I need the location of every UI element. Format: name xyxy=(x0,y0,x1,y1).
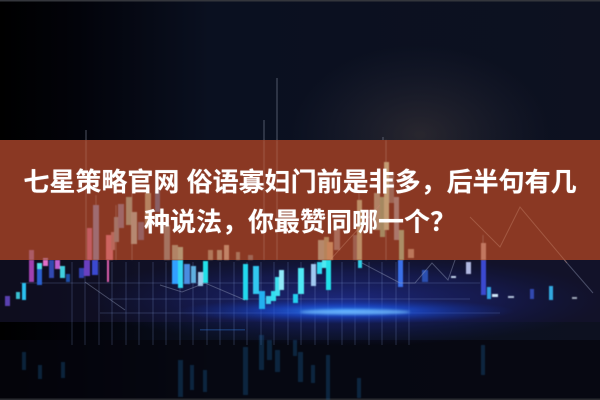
panel: title band xyxy=(0,140,600,260)
title xyxy=(23,167,577,237)
trend line through band xyxy=(330,205,567,263)
trend lines xyxy=(85,207,593,310)
candlesticks seen through band xyxy=(29,140,486,260)
title: 七星策略官网 俗语寡妇门前是非多，后半句有几 xyxy=(23,167,577,197)
wicks above band xyxy=(86,78,383,140)
bright candlesticks below band xyxy=(5,260,577,309)
title: 种说法，你最赞同哪一个？ xyxy=(144,207,456,237)
reflected candlesticks xyxy=(22,335,485,400)
panel: lower chart glow and grid xyxy=(20,254,600,346)
